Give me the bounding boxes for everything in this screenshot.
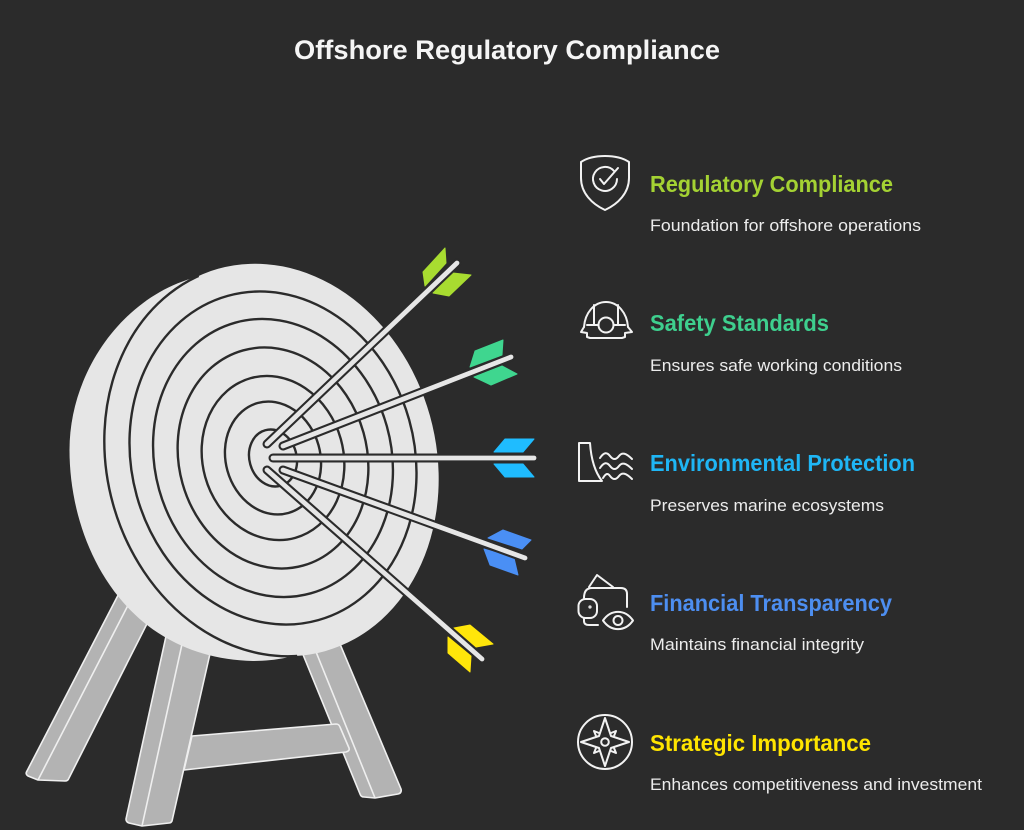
description: Ensures safe working conditions (650, 356, 902, 375)
target illustration (26, 225, 534, 826)
description: Preserves marine ecosystems (650, 496, 884, 515)
title: Offshore Regulatory Compliance (294, 35, 720, 65)
item: strategic importance (578, 715, 982, 794)
description: Maintains financial integrity (650, 635, 865, 654)
heading: Environmental Protection (650, 450, 915, 476)
arrow: green (283, 340, 517, 446)
heading: Strategic Importance (650, 730, 871, 756)
icon: compass star (578, 715, 632, 769)
stand legs (26, 576, 401, 826)
item: environmental protection (579, 443, 915, 515)
arrow: blue (283, 470, 531, 575)
heading: Regulatory Compliance (650, 171, 893, 197)
target board (70, 264, 439, 661)
heading: Safety Standards (650, 310, 829, 336)
item: regulatory compliance (581, 156, 921, 235)
item: safety standards (581, 302, 902, 375)
heading: Financial Transparency (650, 590, 892, 616)
icon: dam and waves (579, 443, 632, 481)
icon: wallet with eye (578, 575, 633, 629)
arrow: lime (267, 248, 471, 444)
item: financial transparency (578, 575, 892, 654)
icon: hard hat (581, 302, 632, 338)
description: Enhances competitiveness and investment (650, 775, 982, 794)
description: Foundation for offshore operations (650, 216, 921, 235)
icon: shield check (581, 156, 629, 210)
arrow: sky blue (273, 439, 534, 477)
arrow: yellow (267, 470, 493, 672)
